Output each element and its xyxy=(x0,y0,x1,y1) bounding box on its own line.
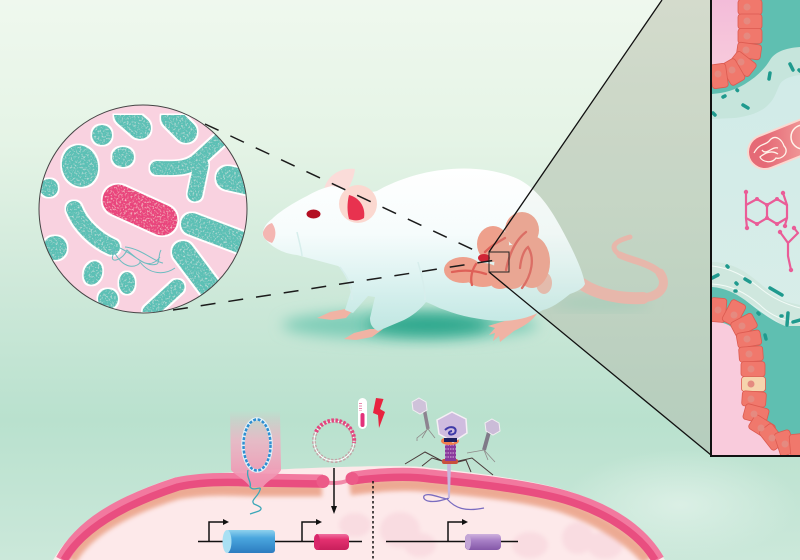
background glow lower right xyxy=(562,450,798,560)
pink bacterium xyxy=(118,200,162,220)
phage head DNA xyxy=(445,427,456,435)
purple gene xyxy=(465,534,501,550)
cytoplasm xyxy=(53,466,665,560)
phage head xyxy=(437,412,467,442)
eye xyxy=(306,210,320,218)
wall rounded ends xyxy=(316,472,358,488)
upper pink tissue xyxy=(712,0,740,64)
cone edge lines xyxy=(489,0,711,455)
sheath stripes xyxy=(445,445,456,457)
transfer DNA loop xyxy=(243,419,271,514)
molecule atoms xyxy=(744,190,796,272)
lower teal lumen xyxy=(712,287,800,434)
nucleoid squiggle xyxy=(754,138,786,162)
mucus highlight lines xyxy=(712,266,800,322)
intestine lobes xyxy=(444,212,552,294)
uptake arrow xyxy=(331,468,337,514)
dashed leader lines xyxy=(173,124,496,310)
upper cell nuclei xyxy=(714,4,750,78)
phage tail tube xyxy=(447,462,451,498)
phage sheath xyxy=(445,441,456,461)
lower epithelial cells xyxy=(709,297,800,459)
bacteriophage main xyxy=(405,412,493,510)
metabolite molecules xyxy=(746,192,798,270)
front ear xyxy=(339,185,377,223)
mouse shadow xyxy=(282,298,650,340)
lower mucus layer xyxy=(712,262,800,326)
promoter arrows xyxy=(209,522,463,541)
phage baseplate xyxy=(442,459,458,464)
panel base xyxy=(712,0,800,455)
zoom cone from gut to detail panel xyxy=(489,0,711,455)
injected DNA xyxy=(424,495,484,510)
flagella xyxy=(112,247,175,273)
gut veins xyxy=(452,232,532,288)
promoter arrowheads xyxy=(223,519,468,525)
nucleoid ghost texture xyxy=(339,512,623,559)
thin membrane at pore xyxy=(320,478,352,483)
cell wall xyxy=(62,474,658,560)
upper epithelial cells xyxy=(709,0,762,89)
free plasmid xyxy=(314,420,354,461)
tail xyxy=(582,237,663,298)
icon: lightning bolt xyxy=(373,398,385,428)
nose xyxy=(263,223,275,243)
plasmid ring xyxy=(791,125,800,149)
gene map left xyxy=(198,519,518,553)
fur shading xyxy=(297,232,425,300)
mouse xyxy=(263,168,663,342)
lower cell nuclei xyxy=(714,306,788,448)
conjugation pilus tube xyxy=(230,410,281,487)
dotted divider xyxy=(372,481,374,560)
phage legs xyxy=(405,452,493,475)
circle rim xyxy=(39,105,247,313)
bacteriophage left xyxy=(412,398,435,441)
front foot far xyxy=(317,309,354,320)
gut red spot xyxy=(478,254,490,262)
back ear xyxy=(324,169,355,192)
small mucus bacteria xyxy=(712,64,800,339)
blue gene xyxy=(222,530,275,553)
upper teal lumen xyxy=(712,0,800,94)
periplasm band xyxy=(70,484,648,560)
bacteriophage right xyxy=(467,419,500,462)
lower pink tissue xyxy=(712,322,790,455)
mouse body xyxy=(263,168,585,331)
genome line xyxy=(198,540,518,542)
bacterial cell xyxy=(53,410,665,560)
detail panel: gut lining xyxy=(709,0,800,459)
panel frame xyxy=(711,0,800,456)
source box on gut xyxy=(489,252,509,272)
phage neck xyxy=(444,438,457,442)
exposed gut xyxy=(444,212,552,294)
icon: thermometer xyxy=(358,398,367,429)
hind foot xyxy=(488,306,538,342)
upper mucus layer xyxy=(712,40,800,119)
front foot near xyxy=(344,329,383,340)
microbiota magnifier circle xyxy=(39,105,250,313)
phage collar xyxy=(441,437,459,445)
magenta gene xyxy=(314,534,349,550)
cone tint over mouse xyxy=(489,0,711,455)
bacteria group xyxy=(40,115,250,312)
capsule bacterium with DNA xyxy=(754,125,800,162)
